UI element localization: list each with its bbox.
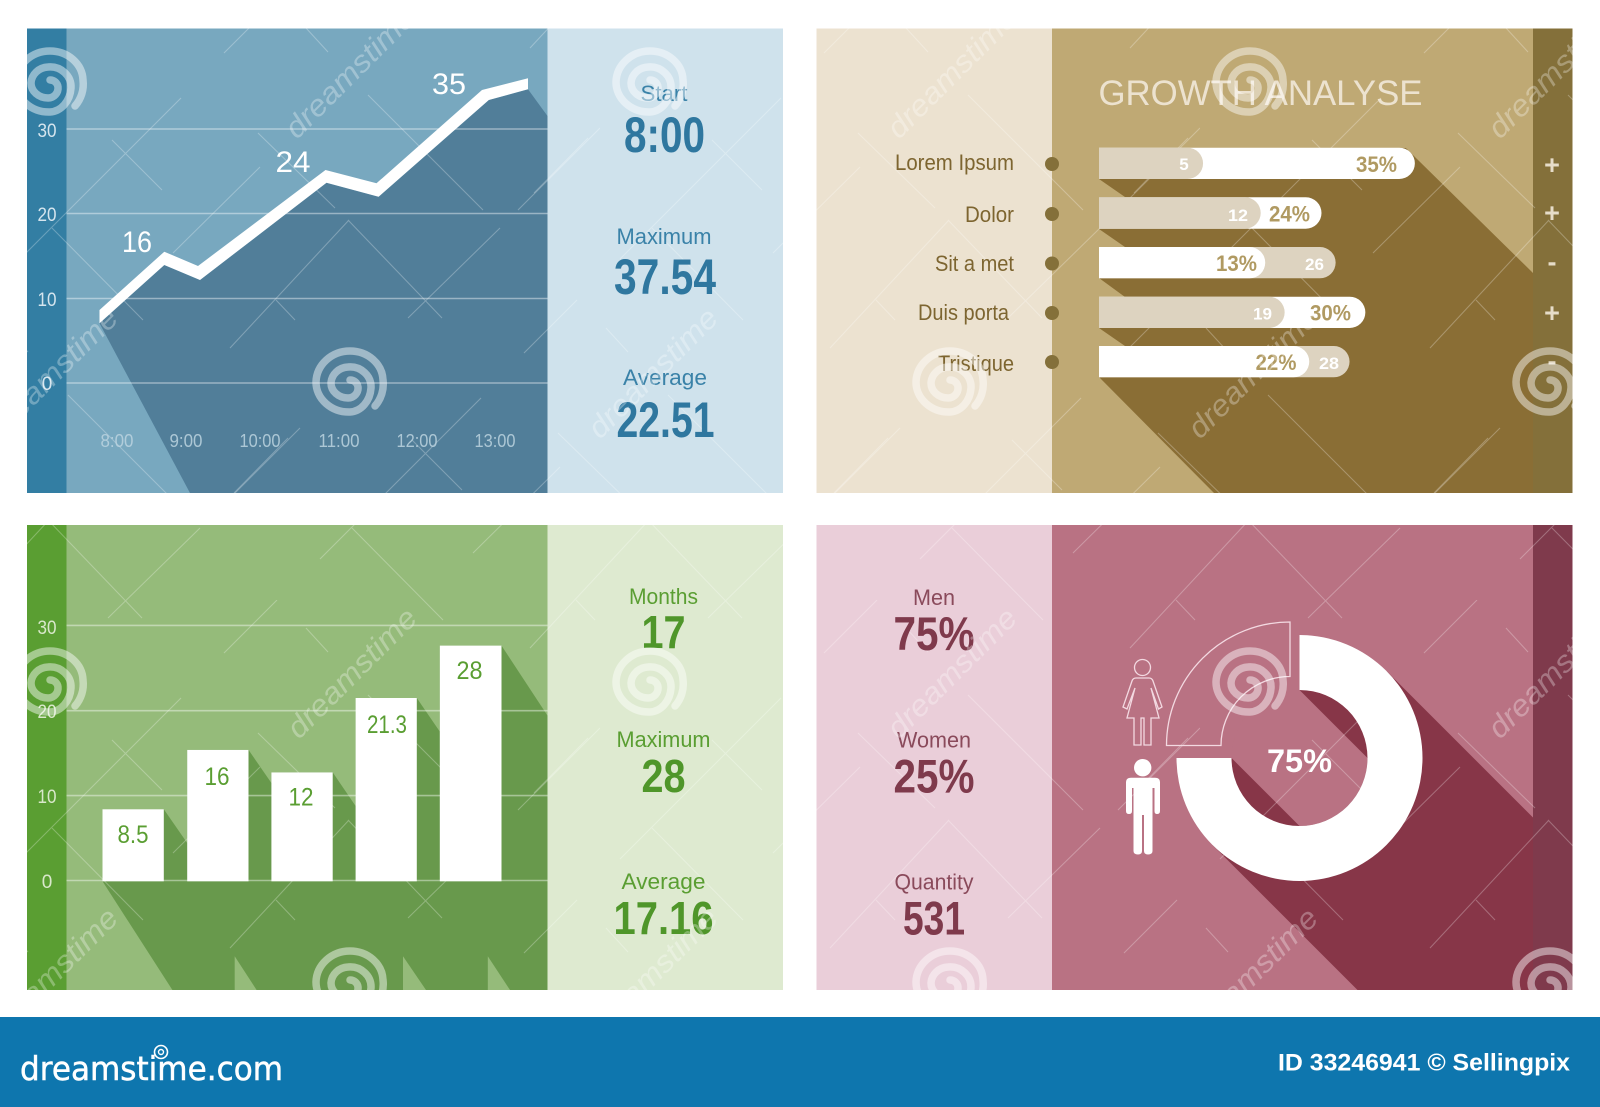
row labels: Sit a met [935, 251, 1014, 276]
x axis time labels: 12:00 [396, 431, 438, 451]
plus and minus markers: + [1544, 150, 1560, 180]
bar values [1179, 152, 1397, 375]
watermark: dreamstime text: dreamstime [1182, 902, 1325, 1045]
row labels: Tristique [938, 351, 1014, 376]
white donut 75 percent [1176, 635, 1422, 881]
bar values: 13% [1216, 251, 1257, 276]
bar values: 5 [1179, 155, 1189, 174]
donut percent label: 75% [1267, 743, 1332, 779]
bar values: 28 [456, 657, 482, 685]
row labels [895, 150, 1014, 376]
stats: men, women, quantity: Women [897, 728, 971, 752]
watermark: dreamstime text: dreamstime [279, 2, 422, 145]
stats: months, maximum, average: Average [622, 869, 706, 894]
plus and minus markers: + [1544, 298, 1560, 328]
watermark: dreamstime text: dreamstime [881, 2, 1024, 145]
bar values: 8.5 [118, 821, 148, 849]
plus and minus markers [1544, 150, 1560, 376]
shadow gaps along bottom [235, 956, 510, 990]
donut hole [1232, 690, 1368, 826]
stats: men, women, quantity: Men [913, 585, 955, 610]
line value labels: 16 [122, 226, 152, 259]
watermark: dreamstime text: dreamstime [1182, 302, 1325, 445]
grid lines and y axis [38, 121, 548, 395]
grid lines and y axis: 30 [38, 618, 56, 639]
stats: men, women, quantity: 531 [903, 892, 965, 944]
icon: man [1126, 759, 1160, 854]
line value labels [122, 68, 466, 259]
line value labels: 35 [432, 68, 466, 101]
title: GROWTH ANALYSE [1098, 74, 1422, 113]
long shadow under bars [102, 646, 548, 990]
bar values: 16 [204, 763, 230, 791]
stats: men, women, quantity: 25% [894, 750, 974, 802]
panel: men and women donut (rose) [816, 525, 1572, 990]
grid lines and y axis: 20 [38, 205, 56, 226]
stats: men, women, quantity [894, 585, 974, 944]
footer logo: dreamstime.com [20, 1049, 283, 1088]
row labels: Duis porta [918, 300, 1010, 325]
stats: start, maximum, average: Average [623, 365, 707, 390]
plus and minus markers: - [1548, 247, 1556, 277]
grid lines and y axis: 0 [42, 872, 52, 893]
stats: start, maximum, average: 22.51 [616, 392, 714, 448]
grid lines and y axis: 10 [38, 787, 56, 808]
bar values: 21.3 [367, 711, 407, 739]
x axis time labels: 10:00 [240, 431, 280, 451]
horizontal bars [1099, 148, 1415, 377]
outlined 25 percent wedge [1166, 622, 1290, 746]
stats: start, maximum, average: 37.54 [614, 249, 716, 305]
grid lines and y axis: 10 [38, 290, 56, 311]
stats: men, women, quantity: 75% [894, 607, 974, 660]
bar values: 35% [1356, 152, 1397, 177]
bar values: 26 [1305, 255, 1324, 274]
stats: start, maximum, average: 8:00 [624, 107, 705, 163]
watermark: dreamstime text: dreamstime [582, 902, 725, 1045]
plus and minus markers: - [1548, 346, 1556, 376]
x axis time labels: 13:00 [474, 431, 516, 451]
x axis time labels [100, 431, 516, 451]
bar values: 19 [1253, 304, 1272, 324]
x axis time labels: 8:00 [100, 431, 134, 451]
stats: months, maximum, average: Maximum [616, 727, 710, 752]
row bullets [1045, 157, 1059, 369]
stats: start, maximum, average: Start [640, 81, 688, 106]
grid lines and y axis: 20 [38, 702, 56, 723]
stats: months, maximum, average [614, 584, 714, 944]
icon: woman outline [1123, 660, 1162, 745]
stats: months, maximum, average: 17 [642, 606, 686, 658]
footer credit: ID 33246941 © Sellingpix [1278, 1050, 1571, 1076]
white bars [102, 646, 502, 881]
stats: men, women, quantity: Quantity [894, 870, 974, 894]
grid lines and y axis [38, 618, 548, 893]
bar values: 22% [1256, 350, 1296, 375]
panel: bar chart (green) [27, 525, 783, 990]
panel: line chart (blue) [27, 28, 783, 493]
stats: months, maximum, average: 28 [642, 750, 686, 802]
row labels: Dolor [965, 202, 1014, 227]
long shadow under bars [1099, 148, 1533, 493]
bar values: 24% [1269, 202, 1310, 226]
bar values: 28 [1319, 354, 1339, 373]
bar values: 30% [1310, 300, 1351, 326]
long shadow behind donut [1212, 671, 1533, 990]
watermark: dreamstime text: dreamstime [281, 602, 424, 745]
bar values: 12 [288, 784, 314, 812]
bar values: 12 [1228, 206, 1248, 225]
row labels: Lorem Ipsum [895, 150, 1014, 175]
line value labels: 24 [276, 146, 310, 179]
plus and minus markers: + [1544, 198, 1560, 228]
watermark: dreamstime text: dreamstime [582, 302, 725, 445]
bar values [118, 657, 482, 849]
stats: start, maximum, average: Maximum [616, 224, 712, 249]
watermark: dreamstime text: dreamstime [881, 602, 1024, 745]
white trend line [100, 78, 528, 323]
grid lines and y axis: 0 [42, 374, 52, 395]
long shadow under the line [100, 89, 548, 493]
panel: growth analyse (tan) [816, 28, 1572, 493]
x axis time labels: 11:00 [318, 431, 360, 451]
x axis time labels: 9:00 [170, 431, 202, 451]
stats: months, maximum, average: Months [629, 584, 698, 609]
grid lines and y axis: 30 [38, 121, 56, 142]
stats: months, maximum, average: 17.16 [614, 892, 714, 944]
stats: start, maximum, average [614, 81, 716, 448]
footer bar [0, 1017, 1600, 1107]
